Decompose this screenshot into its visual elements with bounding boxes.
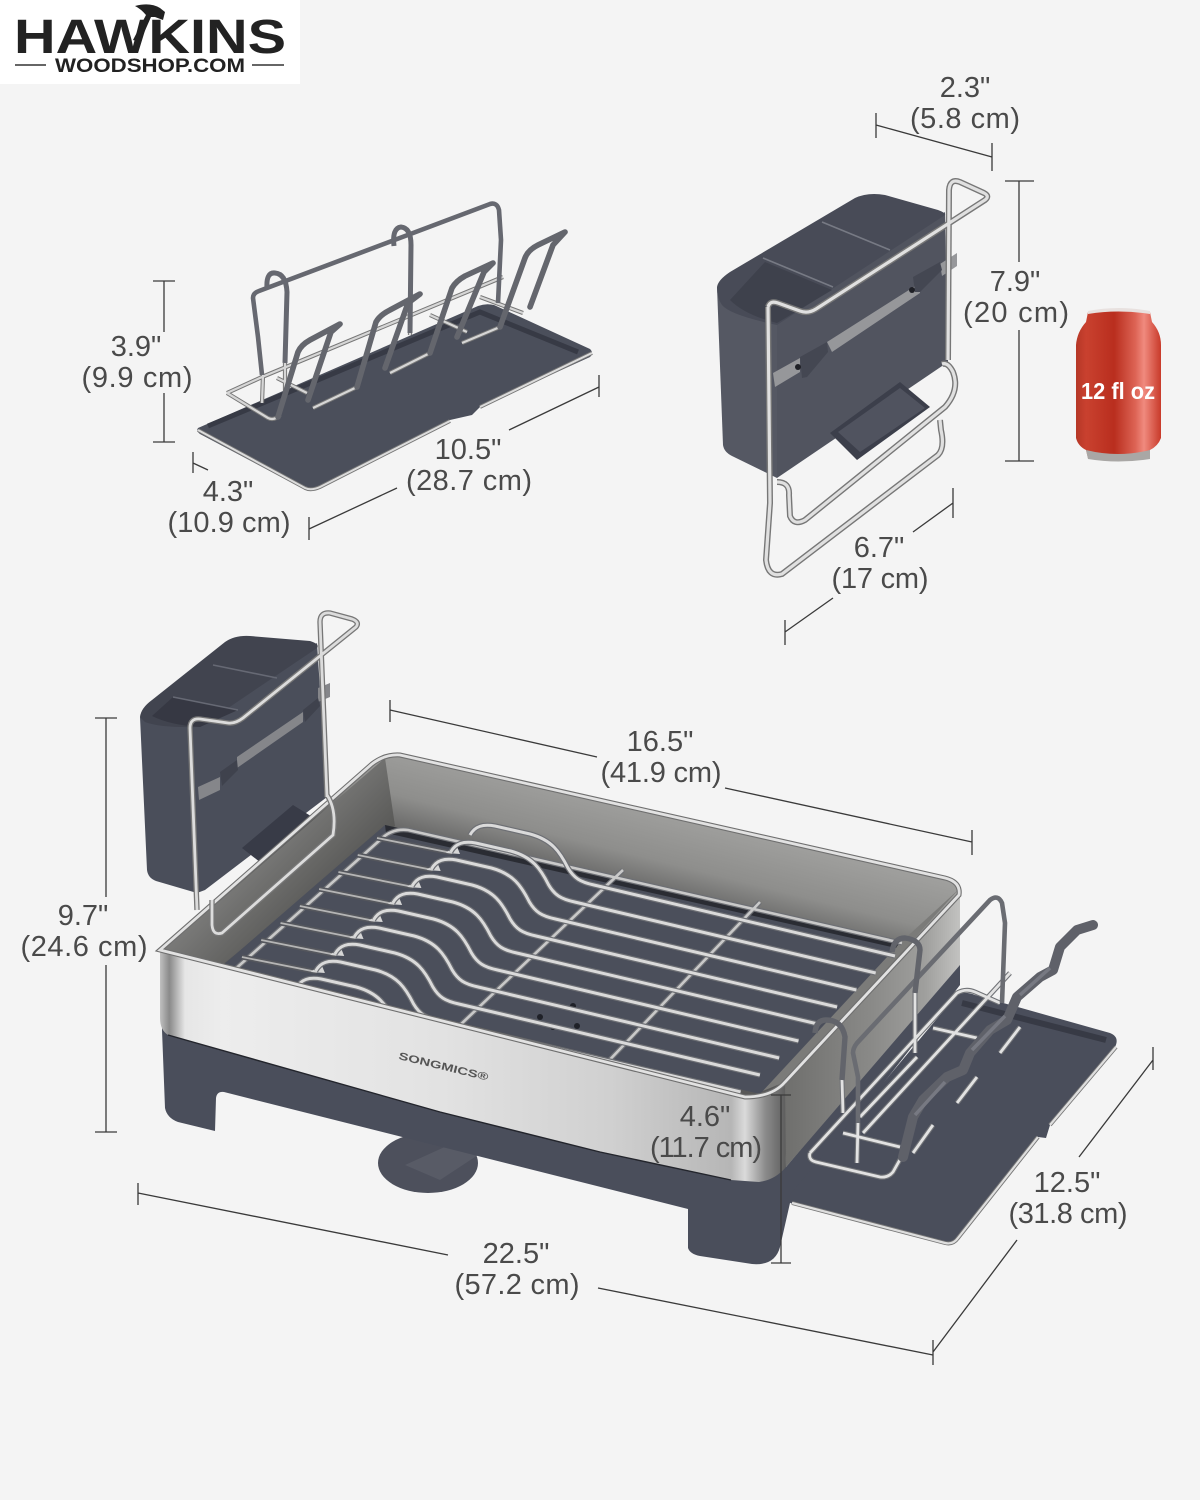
dimension: 2.3 in width	[876, 72, 1020, 171]
dimension: 3.9 in height	[82, 281, 192, 442]
dimension: 4.6 in tray height: 4.6"	[680, 1101, 730, 1133]
clips	[800, 262, 942, 378]
large utensil holder	[140, 636, 330, 893]
base	[162, 960, 960, 1264]
dimension: 10.5 in length	[309, 375, 599, 529]
can body	[1076, 309, 1161, 461]
logo: Hawkins Woodshop: WOODSHOP.COM	[55, 56, 245, 77]
large glass rack wires	[810, 898, 1093, 1177]
metal strip	[773, 253, 957, 387]
tray rim	[160, 755, 959, 1097]
brand mark: SONGMICS®	[397, 1050, 490, 1084]
dimension: 6.7 in length	[785, 488, 953, 645]
dimension: 7.9 in height	[963, 181, 1069, 461]
silver wire base	[227, 277, 523, 419]
product: small drip tray with glass rack	[197, 204, 592, 489]
holder left face	[717, 287, 777, 478]
dimension: 12.5 in depth: (31.8 cm)	[1008, 1198, 1128, 1230]
chrome wire frame	[766, 181, 987, 575]
holder clips	[220, 698, 320, 786]
dimension: 2.3 in width: (5.8 cm)	[910, 103, 1020, 135]
hooks	[815, 938, 920, 1080]
holder strip	[198, 683, 330, 800]
dimension: 7.9 in height: (20 cm)	[963, 297, 1069, 329]
coated clips	[903, 925, 1093, 1157]
dimension: 16.5 in inner length: (41.9 cm)	[600, 757, 722, 789]
dimension: 16.5 in inner length	[390, 700, 972, 855]
hooks	[267, 227, 411, 363]
logo: Hawkins Woodshop: HAWKINS	[14, 11, 286, 64]
dimension: 4.3 in depth: 4.3"	[203, 476, 253, 508]
dimension: 9.7 in height: (24.6 cm)	[20, 931, 148, 963]
dimension: 22.5 in length	[138, 1183, 933, 1355]
soda can scale reference	[1076, 308, 1161, 462]
dimension: 10.5 in length: 10.5"	[435, 434, 501, 466]
dimension: 22.5 in length: 22.5"	[483, 1238, 549, 1270]
dimension: 12.5 in depth: 12.5"	[1034, 1167, 1100, 1199]
dimension: 12.5 in depth	[933, 1047, 1153, 1365]
can label: 12 fl oz	[1081, 378, 1155, 404]
dimension: 4.6 in tray height: (11.7 cm)	[650, 1132, 762, 1164]
dimension: 9.7 in height: 9.7"	[58, 900, 108, 932]
holder opening	[717, 194, 945, 325]
dimension: 9.7 in height	[20, 718, 148, 1132]
steel front face	[160, 952, 786, 1182]
tray floor	[222, 825, 900, 1094]
dividers	[763, 222, 890, 287]
holder front face	[777, 212, 948, 478]
dimension: 16.5 in inner length: 16.5"	[627, 726, 693, 758]
dimension: 2.3 in width: 2.3"	[940, 72, 990, 104]
holder wire frame	[190, 613, 357, 934]
dimension: 6.7 in length: 6.7"	[854, 532, 904, 564]
dimension: 22.5 in length: (57.2 cm)	[454, 1269, 580, 1301]
logo: Hawkins Woodshop	[0, 0, 300, 84]
dimension: 4.3 in depth	[168, 452, 309, 540]
dimension: 3.9 in height: 3.9"	[111, 331, 161, 363]
dimension: 4.3 in depth: (10.9 cm)	[168, 507, 290, 539]
steel side face	[783, 890, 960, 1167]
dimension: 6.7 in length: (17 cm)	[832, 563, 928, 595]
coated back bar	[253, 204, 501, 375]
drain holes	[537, 1003, 580, 1030]
suction cup	[378, 1133, 478, 1193]
large drip tray	[788, 993, 1117, 1243]
product: utensil holder detail	[717, 181, 987, 575]
main product: dish rack	[140, 613, 1117, 1264]
tray interior wall	[163, 756, 958, 1097]
dimension: 10.5 in length: (28.7 cm)	[406, 465, 532, 497]
holder sponge tray	[242, 805, 322, 870]
drip tray	[197, 304, 592, 489]
dimension: 4.6 in tray height	[650, 1095, 791, 1263]
wire rack rungs	[232, 825, 902, 1109]
dimension: 3.9 in height: (9.9 cm)	[82, 362, 192, 394]
sponge tray	[830, 382, 930, 460]
coated clip wire	[278, 232, 565, 417]
coated back bar	[853, 898, 1005, 1123]
dimension: 7.9 in height: 7.9"	[990, 266, 1040, 298]
silver rack frame	[810, 973, 1020, 1177]
